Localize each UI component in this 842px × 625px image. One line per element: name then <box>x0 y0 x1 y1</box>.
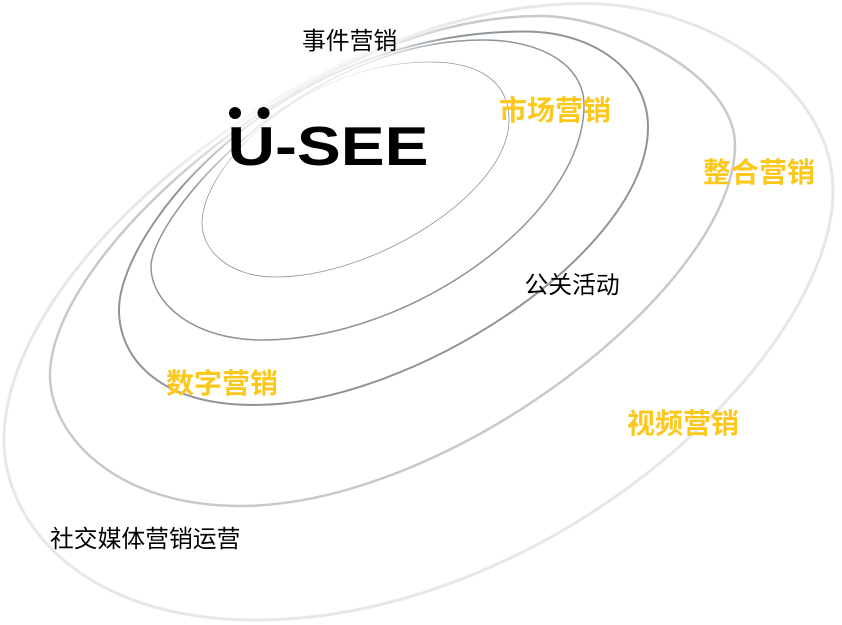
orbit ring 4 <box>50 16 735 506</box>
orbit ring 2 <box>151 40 584 340</box>
logo: U-SEE: U-SEE <box>228 115 428 177</box>
label: social media marketing operations: 社交媒体营销运营 <box>50 526 240 553</box>
label: event marketing: 事件营销 <box>302 28 397 55</box>
label: public relations: 公关活动 <box>524 272 620 299</box>
label: market marketing: 市场营销 <box>499 95 611 126</box>
label: integrated marketing: 整合营销 <box>703 157 815 188</box>
orbit ring 3 <box>119 32 648 405</box>
orbit ring 1 <box>202 62 509 277</box>
label: digital marketing: 数字营销 <box>166 368 278 399</box>
label: video marketing: 视频营销 <box>627 408 739 439</box>
